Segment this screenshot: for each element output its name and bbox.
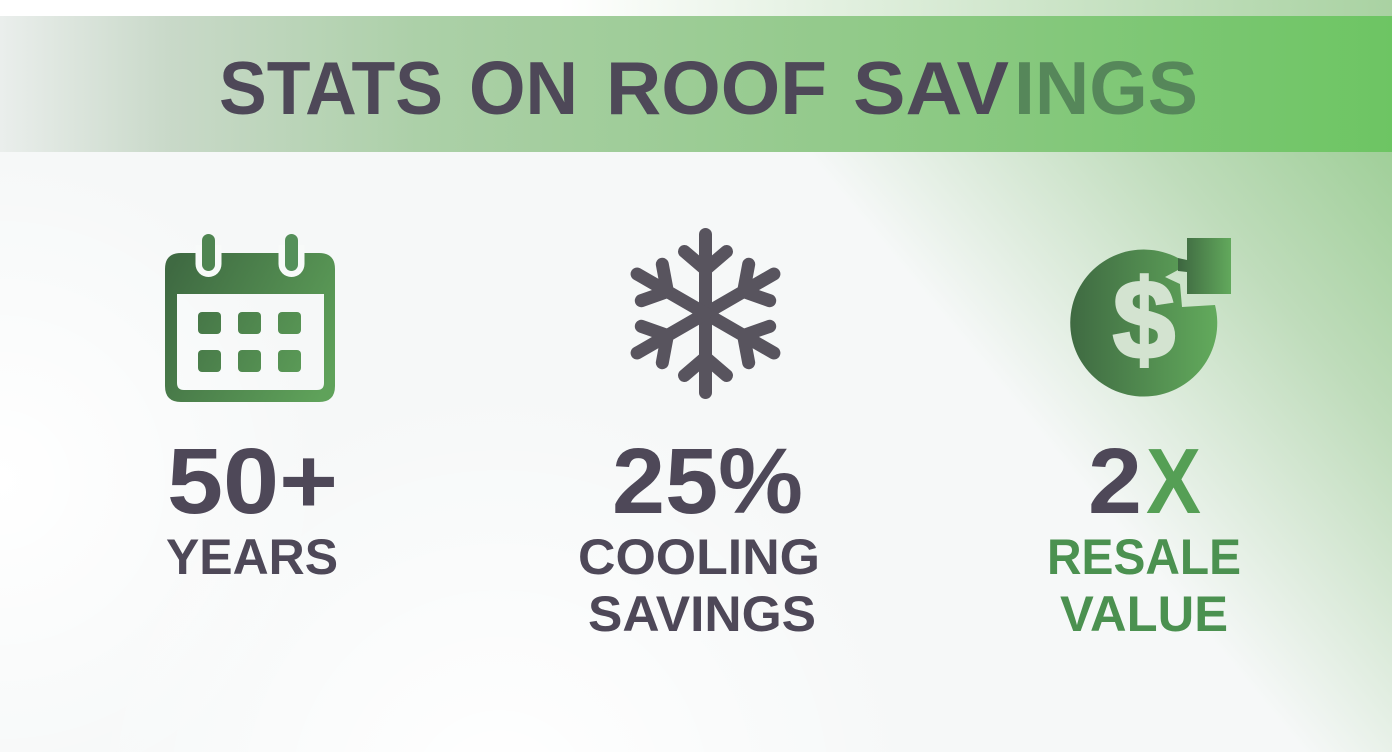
stat: resale value <box>1047 238 1255 642</box>
icon: dollar coin with arrow <box>1070 238 1231 397</box>
label: cooling savings: COOLING <box>578 529 820 585</box>
stat: cooling savings <box>578 234 834 642</box>
label: resale value: RESALE <box>1047 529 1241 585</box>
value: 50+: 50+ <box>167 429 338 533</box>
label: cooling savings: SAVINGS <box>588 586 816 642</box>
value: 2x: 2 <box>1088 429 1142 533</box>
title: ROOF <box>606 46 827 130</box>
value: 2x: X <box>1146 429 1201 533</box>
label: resale value: VALUE <box>1060 586 1228 642</box>
dollar sign: $ <box>1113 257 1175 382</box>
label: years: YEARS <box>166 529 338 585</box>
value: 25%: 25% <box>612 429 803 533</box>
title banner <box>0 16 1392 152</box>
title: SAV <box>853 46 1009 130</box>
title: STATS <box>219 46 443 130</box>
icon: snowflake <box>627 234 784 392</box>
icon: calendar <box>165 234 335 402</box>
stat: years <box>165 234 338 585</box>
title: INGS <box>1014 46 1198 130</box>
title: ON <box>469 46 578 130</box>
